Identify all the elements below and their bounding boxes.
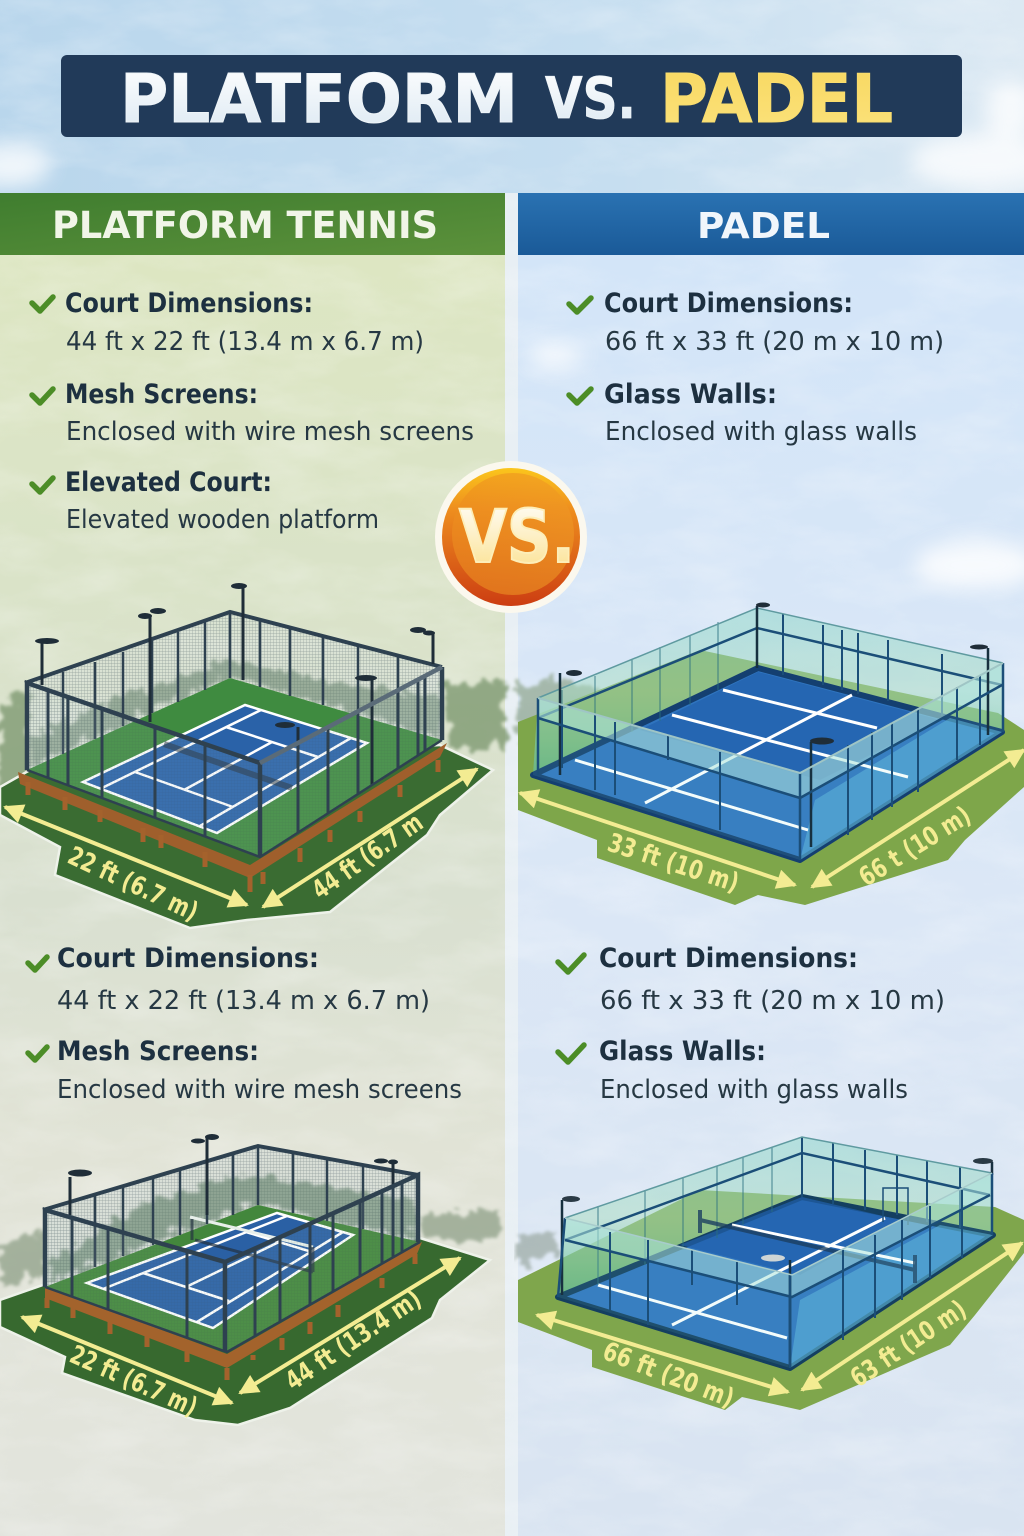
background trees [518,1232,558,1265]
background trees [518,678,620,745]
front glass [558,1173,993,1368]
background trees [0,680,505,790]
dimension arrow: width [5,807,247,905]
court floor [558,1197,993,1368]
dimension label: length: 44 ft (13.4 m) [280,1284,427,1397]
dimension arrow: width [22,1317,232,1403]
net [700,1210,915,1283]
back posts [95,1146,393,1267]
front fence panels [25,667,442,857]
text block: platform tennis lower list: Enclosed with wire mesh screens [57,1075,462,1105]
text block: padel lower list: Glass Walls: [599,1036,766,1067]
heading: platform tennis: PLATFORM TENNIS [52,204,438,247]
back fence panels [25,612,442,770]
panel: padel background [518,255,1024,1536]
heading: padel [518,193,1024,255]
court surface [83,705,367,833]
front posts [48,676,425,836]
trees through fence [30,660,438,766]
back rails [538,628,1002,718]
panel: platform tennis background [0,255,505,1536]
court right side tint [800,718,1002,860]
text block: platform tennis lower list: Mesh Screens: [57,1036,259,1067]
text block: padel upper list: Glass Walls: [604,379,777,410]
corner posts and rails [27,667,442,857]
dimension arrow: length [812,750,1024,887]
light poles [560,606,988,847]
court illustration: padel top [518,602,1024,905]
dimension label: width: 22 ft (6.7 m) [65,1340,202,1423]
light heads [566,602,988,744]
back rails [43,1146,418,1210]
text block: padel lower list: Court Dimensions: [599,943,858,974]
text block: platform tennis upper list [32,288,474,535]
dimension label: width: 33 ft (10 m) [604,828,742,899]
title word: platform: PLATFORM [120,60,518,138]
text block: platform tennis upper list: Elevated wooden platform [66,505,379,535]
text block: platform tennis upper list: 44 ft x 22 ft (13.4 m x 6.7 m) [66,327,424,357]
court surface [87,1213,353,1328]
deck [45,1242,422,1368]
text block: padel upper list [569,288,944,447]
ground [0,1238,490,1425]
court illustration: padel bottom [518,1137,1024,1414]
base rails [27,740,442,857]
front rails [558,1173,992,1368]
back glass [533,608,1003,775]
light poles [42,587,433,833]
net [164,744,292,788]
dimension arrow: width [537,1315,788,1392]
light heads [68,1134,398,1176]
VS badge [435,461,587,613]
back glass [558,1137,993,1297]
front glass [533,663,1003,860]
back rails [25,612,442,683]
net [190,1217,313,1247]
base rails [45,1242,420,1352]
text block: platform tennis upper list: Elevated Court: [65,467,272,498]
court right side tint [790,1225,993,1368]
back rails [565,1153,990,1240]
dimension arrow: length [802,1243,1022,1390]
light heads [35,583,435,728]
court floor [533,668,1002,860]
text block: platform tennis upper list: Mesh Screens: [65,379,258,410]
deck [18,743,447,878]
upper glass band [538,663,1003,798]
dimension arrow: length [263,769,477,907]
front posts [610,1190,962,1340]
back posts [63,612,442,754]
court illustration: platform tennis bottom [0,1134,500,1425]
court lines [103,1216,343,1322]
deck legs [28,760,438,892]
ground [518,650,1024,905]
background trees [0,1210,500,1285]
light poles [562,1162,992,1368]
court shading [640,672,940,780]
deck legs [47,1254,415,1380]
back door [883,1188,908,1225]
corner posts and front rails [45,1175,418,1352]
text block: platform tennis lower list: 44 ft x 22 ft (13.4 m x 6.7 m) [57,986,430,1016]
court shading [680,1197,900,1275]
text block: platform tennis lower list [28,943,462,1105]
centre gutter [505,193,518,1536]
court lines [575,690,908,830]
front right rail [260,667,442,763]
title word: vs: VS. [545,66,636,132]
court illustration: platform tennis top [0,583,505,928]
heading: padel: PADEL [697,206,830,247]
court lines [100,710,351,826]
front fence panels [43,1175,420,1352]
text block: padel lower list: Enclosed with glass walls [600,1075,908,1105]
text block: padel upper list: Court Dimensions: [604,288,853,319]
text block: platform tennis upper list: Enclosed with wire mesh screens [66,417,474,447]
ground [518,1190,1024,1410]
text block: platform tennis upper list: Court Dimensions: [65,288,313,319]
dimension label: width: 66 ft (20 m) [598,1337,738,1414]
front posts [562,676,980,835]
dimension label: length: 66 t (10 m) [854,801,977,893]
text block: padel upper list: 66 ft x 33 ft (20 m x 10 m) [605,327,944,357]
ground [0,745,493,928]
back posts [802,1137,960,1228]
dimension arrow: width [520,793,795,885]
dimension label: length: 44 ft (6.7 m [307,808,429,906]
text block: padel upper list: Enclosed with glass walls [605,417,917,447]
upper glass band [565,1173,992,1297]
dimension label: width: 22 ft (6.7 m) [63,841,203,928]
back posts [757,608,942,716]
clouds in padel panel [527,343,1024,589]
court floor [27,678,442,857]
text block: padel lower list [558,943,945,1105]
text block: platform tennis lower list: Court Dimensions: [57,943,319,974]
court lines [598,1218,915,1338]
title banner [61,55,962,138]
light head: front [761,1254,785,1262]
light heads [562,1158,993,1202]
front rails [538,663,1003,860]
text block: padel lower list: 66 ft x 33 ft (20 m x 10 m) [600,986,945,1016]
heading: platform tennis [0,193,505,255]
front posts [72,1182,402,1338]
VS badge: VS. [459,495,575,580]
dimension label: length: 63 ft (10 m) [845,1295,972,1394]
dimension arrow: length [240,1258,460,1393]
back fence panels [43,1146,420,1287]
light poles [70,1138,393,1215]
court floor [45,1205,420,1352]
trees through fence [48,1175,415,1283]
title word: padel: PADEL [660,60,893,138]
clouds in header sky [0,80,1024,187]
